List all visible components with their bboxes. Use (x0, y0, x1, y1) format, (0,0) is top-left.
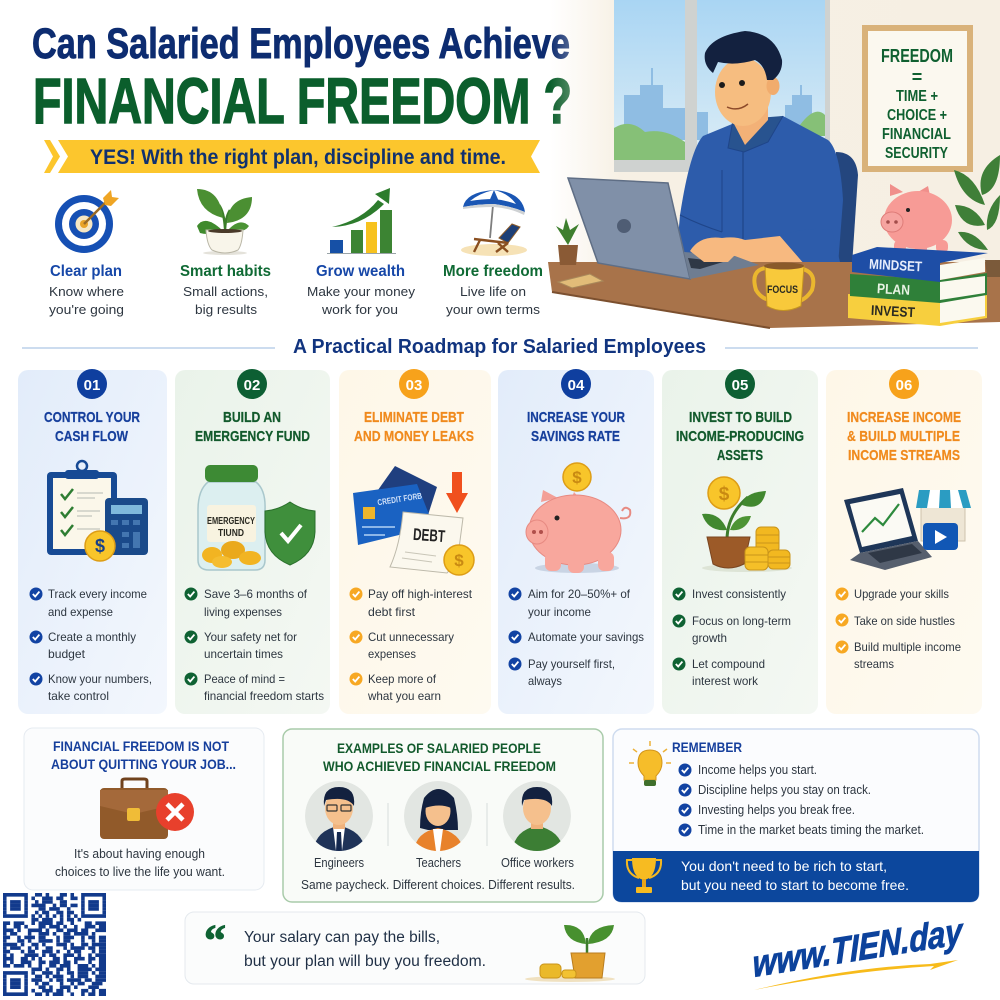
bullet list: Keep more of (368, 672, 437, 686)
bullet list: Build multiple income (854, 640, 961, 654)
man (676, 31, 843, 266)
benefit: clear plan: Clear plan (50, 263, 122, 280)
bullet list: uncertain times (204, 647, 283, 661)
benefit: more freedom: More freedom (443, 263, 543, 280)
framed poster: FREEDOM (881, 46, 953, 66)
icon: sprout in coin pot (525, 925, 615, 982)
panel: not about quitting: It's about having enough (74, 846, 205, 861)
window with skyline (614, 0, 830, 172)
benefit: grow wealth (307, 188, 416, 317)
panel: remember: Income helps you start. (698, 762, 817, 777)
bullet list: Let compound (692, 657, 765, 671)
banner: yes answer (44, 140, 540, 173)
panel: step 06 multiple income: & BUILD MULTIPLE (847, 428, 960, 445)
bullet list: always (528, 674, 562, 688)
panel: step 04 savings rate: SAVINGS RATE (531, 428, 620, 445)
bullet list: Save 3–6 months of (204, 587, 308, 601)
notebook (558, 274, 603, 288)
bullet list: financial freedom starts (204, 689, 324, 703)
panel: step 05 invest: INCOME-PRODUCING (676, 428, 804, 445)
hero illustration: man at desk (548, 0, 1000, 328)
section heading: roadmap: A Practical Roadmap for Salaried Employees (293, 336, 706, 358)
piggy bank (881, 184, 952, 256)
bullet list: Invest consistently (692, 587, 786, 601)
panel: step 03 eliminate debt: 03 (406, 377, 422, 394)
benefit: smart habits: Small actions, (183, 284, 268, 299)
panel: not about quitting: ABOUT QUITTING YOUR JOB... (51, 756, 236, 772)
panel: step 04 savings rate: 04 (568, 377, 585, 394)
portrait: office worker (503, 781, 571, 851)
right plant (954, 155, 1000, 277)
bullet list: Take on side hustles (854, 614, 955, 628)
panel: examples of salaried people (283, 729, 603, 902)
panel: examples of salaried people: Teachers (416, 855, 461, 870)
framed poster: FINANCIAL (882, 126, 951, 143)
small desk plant (556, 218, 579, 265)
laptop (568, 178, 759, 279)
framed poster: = (912, 67, 922, 87)
book stack: MINDSET (869, 256, 923, 274)
panel: not about quitting (24, 728, 264, 890)
title: Can Salaried Employees Achieve (32, 20, 570, 68)
panel: step 03 eliminate debt: AND MONEY LEAKS (354, 428, 474, 445)
benefit: more freedom (443, 190, 543, 317)
benefit: grow wealth: Make your money (307, 284, 416, 299)
panel: examples of salaried people: WHO ACHIEVED FINANCIAL FREEDOM (323, 758, 556, 774)
panel: quote: Your salary can pay the bills, (244, 929, 440, 946)
bullet list: interest work (692, 674, 759, 688)
framed poster: SECURITY (885, 145, 948, 162)
bullet list: what you earn (367, 689, 441, 703)
book stack: PLAN (877, 280, 910, 298)
bullet list (508, 587, 644, 688)
panel: step 05 invest: INVEST TO BUILD (689, 409, 792, 426)
banner: yes answer: YES! With the right plan, discipline and time. (90, 146, 506, 169)
panel: step 01 cash flow: 01 (84, 377, 100, 394)
bullet list: and expense (48, 605, 113, 619)
bullet list: expenses (368, 647, 416, 661)
panel: remember: Discipline helps you stay on track. (698, 782, 871, 797)
portrait: teacher (404, 781, 472, 851)
benefit: grow wealth: Grow wealth (316, 263, 405, 280)
benefit: clear plan (49, 190, 124, 317)
panel: examples of salaried people: Office workers (501, 855, 574, 870)
bullet list (836, 587, 961, 671)
bullet list: Peace of mind = (204, 672, 285, 686)
framed poster (862, 25, 973, 172)
bullet list: Cut unnecessary (368, 630, 454, 644)
icon: potted plant (197, 189, 252, 255)
icon: money plant and coin stacks: $ (719, 484, 730, 505)
bullet list: Focus on long-term (692, 614, 791, 628)
panel: examples of salaried people: Engineers (314, 855, 364, 870)
panel: step 04 savings rate: INCREASE YOUR (527, 409, 625, 426)
bullet list: Pay off high-interest (368, 587, 473, 601)
icon: credit cards, debt note, arrow (353, 466, 474, 575)
book stack (848, 247, 988, 326)
title: FINANCIAL FREEDOM ? (33, 65, 572, 137)
panel: examples of salaried people: Same paycheck. Different choices. Different results. (301, 877, 575, 892)
icon: bar chart with arrow (327, 188, 396, 254)
focus mug: FOCUS (767, 284, 798, 296)
panel: quote (185, 912, 645, 984)
framed poster: CHOICE + (887, 107, 947, 124)
icon: piggy bank with coin: $ (572, 468, 582, 487)
icon: trophy (627, 858, 661, 893)
panel: remember: Time in the market beats timing the market. (698, 822, 924, 837)
benefit: clear plan: you're going (49, 302, 124, 317)
bullet list: living expenses (204, 605, 282, 619)
panel: step 05 invest: ASSETS (717, 447, 763, 464)
icon: money plant and coin stacks (702, 477, 792, 572)
benefit: grow wealth: work for you (321, 302, 398, 317)
framed poster: TIME + (896, 88, 938, 105)
panel: step 03 eliminate debt (339, 369, 491, 714)
benefit: clear plan: Know where (49, 284, 124, 299)
bullet list: Pay yourself first, (528, 657, 615, 671)
icon: piggy bank with coin (526, 463, 630, 573)
bullet list (350, 587, 473, 703)
panel: step 01 cash flow: CONTROL YOUR (44, 409, 140, 426)
chair (832, 152, 858, 266)
bullet list: Your safety net for (204, 630, 297, 644)
icon: clipboard, calculator, coin (47, 461, 148, 561)
icon: quotation mark: “ (204, 916, 226, 965)
icon: laptop, shop, video (844, 488, 971, 570)
icon: briefcase with x (100, 779, 194, 839)
bullet list (672, 587, 791, 688)
portrait: engineer (305, 781, 373, 851)
benefit: more freedom: Live life on (460, 284, 526, 299)
icon: credit cards, debt note, arrow: $ (454, 551, 464, 570)
title (32, 20, 572, 137)
bullet list (30, 587, 152, 703)
panel: step 03 eliminate debt: ELIMINATE DEBT (364, 409, 464, 426)
desk (548, 262, 1000, 328)
bullet list: Automate your savings (528, 630, 644, 644)
icon: target (55, 190, 119, 253)
icon: savings jar and shield: TIUND (218, 527, 244, 539)
bullet list: streams (854, 657, 894, 671)
panel: quote: but your plan will buy you freedom. (244, 953, 486, 970)
typing hand (690, 238, 746, 262)
panel: step 01 cash flow (18, 369, 167, 714)
bullet list: Upgrade your skills (854, 587, 949, 601)
bullet list: growth (692, 631, 727, 645)
panel: remember (613, 729, 979, 902)
bullet list: debt first (368, 605, 416, 619)
focus mug (754, 262, 813, 310)
book stack: INVEST (871, 302, 916, 320)
logo: www.TIEN.day: www.TIEN.day (752, 909, 964, 985)
icon: clipboard, calculator, coin: $ (95, 536, 105, 556)
benefit: smart habits: big results (195, 302, 258, 317)
blue footer band (613, 851, 979, 902)
bullet list: your income (528, 605, 591, 619)
panel: step 06 multiple income (826, 369, 982, 714)
bullet list: Aim for 20–50%+ of (528, 587, 631, 601)
panel: remember: REMEMBER (672, 739, 742, 755)
bullet list (184, 587, 324, 703)
panel: step 05 invest (662, 369, 818, 714)
icon: light bulb (629, 741, 671, 786)
bullet list: Track every income (48, 587, 147, 601)
panel: step 06 multiple income: 06 (896, 377, 912, 394)
icon: beach umbrella and chair (461, 190, 527, 256)
panel: step 01 cash flow: CASH FLOW (55, 428, 129, 445)
panel: step 06 multiple income: INCREASE INCOME (847, 409, 961, 426)
icon: credit cards, debt note, arrow: CREDIT FORB (377, 490, 423, 507)
panel: remember: but you need to start to become free. (681, 877, 909, 893)
icon: savings jar and shield (198, 465, 315, 570)
bullet list: take control (48, 689, 109, 703)
panel: step 02 emergency fund (175, 369, 330, 714)
benefit: more freedom: your own terms (446, 302, 541, 317)
panel: remember: You don't need to be rich to start, (681, 858, 887, 874)
icon: credit cards, debt note, arrow: DEBT (412, 525, 446, 546)
panel: remember: Investing helps you break free. (698, 802, 855, 817)
benefit: smart habits: Smart habits (180, 263, 271, 280)
panel: not about quitting: FINANCIAL FREEDOM IS NOT (53, 738, 229, 754)
panel: step 02 emergency fund: 02 (244, 377, 260, 394)
panel: not about quitting: choices to live the life you want. (55, 864, 225, 879)
qr code (3, 895, 106, 994)
panel: examples of salaried people: EXAMPLES OF SALARIED PEOPLE (337, 740, 541, 756)
bullet list: Know your numbers, (48, 672, 152, 686)
panel: step 02 emergency fund: EMERGENCY FUND (195, 428, 310, 445)
icon: savings jar and shield: EMERGENCY (207, 515, 255, 527)
bullet list: budget (48, 647, 86, 661)
panel: step 04 savings rate (498, 369, 654, 714)
benefit: smart habits (180, 189, 271, 317)
panel: step 06 multiple income: INCOME STREAMS (848, 447, 960, 464)
panel: step 02 emergency fund: BUILD AN (223, 409, 281, 426)
panel: step 05 invest: 05 (732, 377, 748, 394)
bullet list: Create a monthly (48, 630, 136, 644)
